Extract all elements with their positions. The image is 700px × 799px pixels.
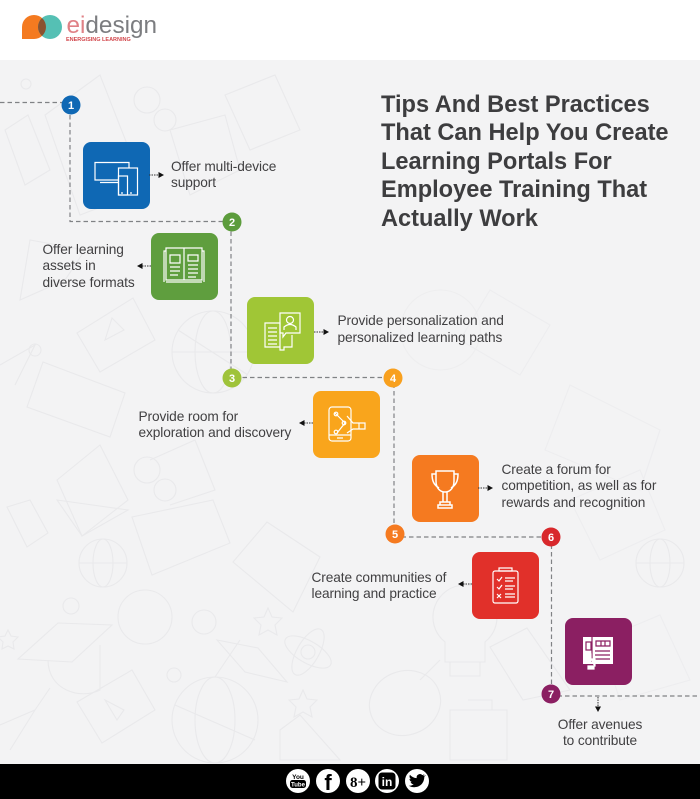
step 5 badge: 5	[391, 529, 398, 541]
icon: Twitter	[405, 769, 429, 793]
step 6 text	[312, 570, 446, 601]
step 1 text: Offer multi-device	[171, 159, 276, 174]
step 5 text: Create a forum for	[502, 462, 611, 477]
step 1 badge: 1	[67, 100, 74, 112]
icon: YouTube	[286, 769, 310, 793]
step 5 icon: trophy	[412, 455, 478, 522]
step 4 text: exploration and discovery	[138, 425, 291, 440]
step 7 badge: 7	[548, 689, 554, 701]
logo: eidesign	[66, 12, 157, 39]
logo	[22, 12, 157, 43]
step 3 badge: 3	[228, 372, 235, 384]
step 6 icon: checklist	[472, 552, 538, 618]
icon: YouTube: You	[292, 774, 304, 781]
step 3 text	[338, 313, 504, 345]
step 4 text: Provide room for	[138, 408, 238, 424]
step 2 text	[42, 242, 135, 290]
title: That Can Help You Create	[381, 120, 669, 146]
step 1 arrow	[149, 172, 164, 178]
step 4 badge: 4	[390, 372, 397, 384]
step 5 text	[502, 462, 656, 510]
step 7 text: to contribute	[563, 733, 637, 748]
step 2 icon: book	[151, 233, 218, 300]
icon: Facebook	[316, 769, 340, 795]
footer bar	[0, 764, 700, 799]
step 3 text: Provide personalization and	[338, 313, 504, 328]
step 4 text	[138, 408, 292, 440]
step 5 arrow	[478, 485, 493, 491]
social icons	[286, 769, 429, 795]
step 7 text: Offer avenues	[558, 717, 642, 732]
step 1 text	[171, 159, 276, 190]
step 7 text	[558, 717, 642, 748]
icon: YouTube: Tube	[291, 782, 306, 788]
step 2 text: assets in	[42, 258, 96, 273]
step 1 icon: devices	[83, 142, 150, 208]
icon: Google Plus	[346, 769, 370, 793]
title	[381, 92, 669, 232]
step 2 arrow	[137, 263, 151, 269]
title: Tips And Best Practices	[381, 92, 650, 118]
icon: LinkedIn	[375, 769, 399, 793]
step 6 text: Create communities of	[312, 570, 446, 585]
step 5 badge	[386, 524, 404, 544]
step 4 badge	[384, 368, 402, 388]
step 3 arrow	[314, 329, 329, 335]
step 3 badge	[222, 368, 242, 388]
header bar	[0, 0, 700, 60]
step 7 icon: contribution form	[565, 618, 632, 684]
title: Employee Training That	[381, 177, 647, 203]
step 1 badge	[62, 96, 80, 114]
step 7 arrow	[595, 697, 601, 712]
step 7 badge	[542, 684, 560, 704]
step 2 badge	[222, 212, 242, 232]
step 4 icon: mobile with tools	[313, 391, 380, 458]
step 6 badge	[542, 528, 560, 546]
step 3 text: personalized learning paths	[338, 330, 502, 345]
step 2 text: Offer learning	[42, 242, 124, 257]
step 2 text: diverse formats	[42, 275, 135, 290]
step 5 text: competition, as well as for	[502, 478, 656, 493]
step 5 text: rewards and recognition	[502, 495, 645, 510]
step 3 icon: profile and book	[247, 297, 314, 364]
title: Actually Work	[381, 206, 538, 232]
icon: Google Plus: 8+	[350, 775, 366, 791]
icon: LinkedIn: in	[382, 775, 392, 789]
step 6 arrow	[458, 581, 472, 587]
icon: Facebook: f	[324, 770, 332, 795]
step 6 badge: 6	[548, 532, 554, 544]
step 2 badge: 2	[228, 217, 235, 229]
step 6 text: learning and practice	[312, 586, 436, 601]
logo: ENERGISING LEARNING	[66, 37, 131, 43]
title: Learning Portals For	[381, 149, 612, 175]
step 1 text: support	[171, 175, 216, 190]
step 4 arrow	[299, 420, 313, 426]
